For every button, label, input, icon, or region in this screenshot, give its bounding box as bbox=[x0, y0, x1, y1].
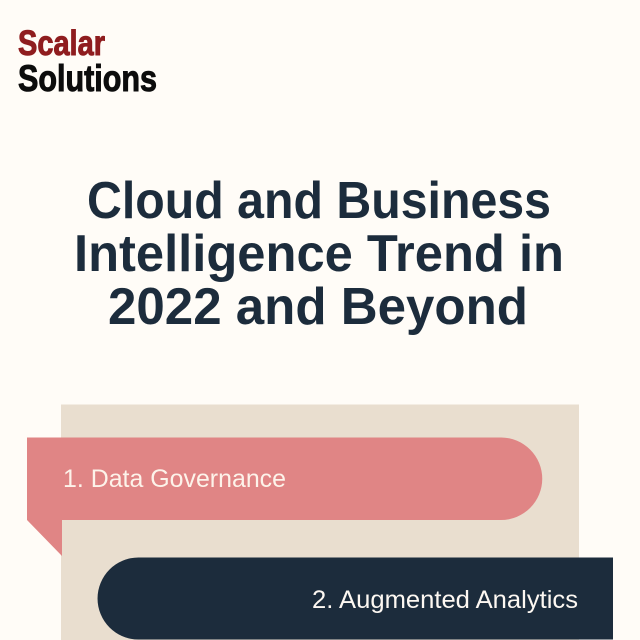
title: Intelligence Trend in bbox=[74, 225, 564, 283]
label 2: 2. Augmented Analytics bbox=[312, 586, 578, 614]
panel: beige backdrop bbox=[61, 404, 579, 640]
navy pill bbox=[98, 558, 613, 640]
title bbox=[74, 172, 564, 336]
logo: Scalar Solutions bbox=[18, 24, 157, 99]
banner 2: Augmented Analytics bbox=[98, 558, 613, 640]
label 1: 1. Data Governance bbox=[63, 465, 286, 493]
ribbon fold bbox=[27, 520, 62, 556]
logo: Scalar Solutions: Solutions bbox=[18, 58, 157, 99]
pink pill bbox=[27, 438, 542, 520]
logo: Scalar Solutions: Scalar bbox=[18, 24, 105, 63]
banner 1: Data Governance bbox=[27, 438, 542, 556]
title: Cloud and Business bbox=[87, 172, 551, 230]
title: 2022 and Beyond bbox=[108, 278, 528, 336]
